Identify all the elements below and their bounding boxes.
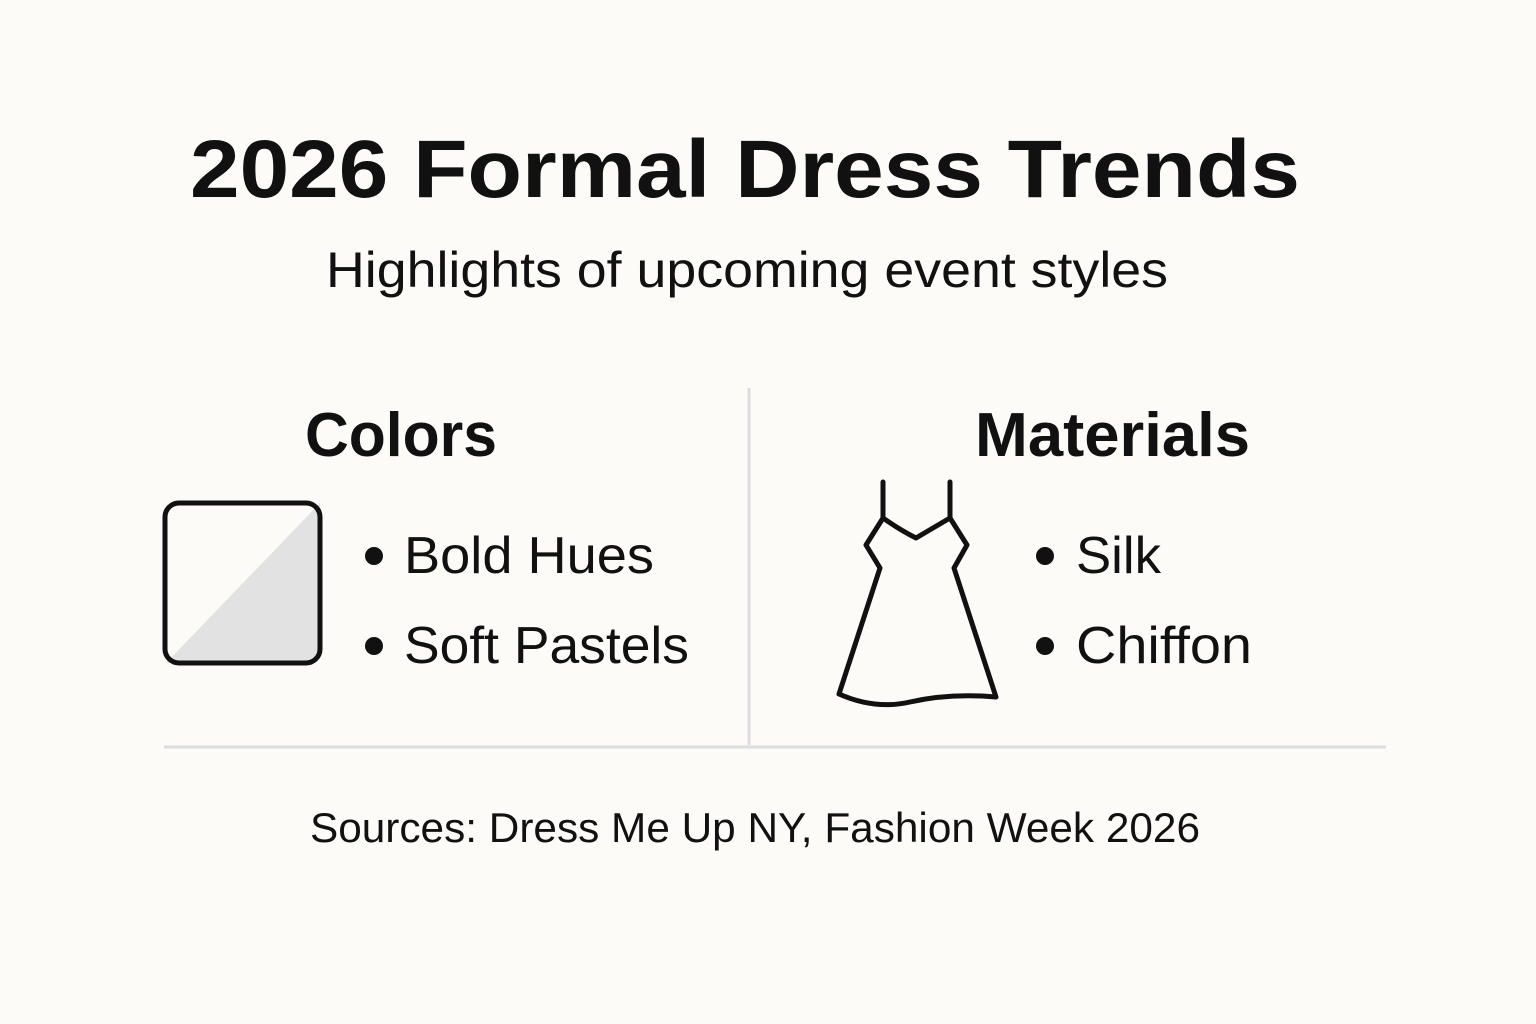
title: 2026 Formal Dress Trends [190,124,1300,215]
panel: colors [165,401,689,675]
list: colors [365,527,689,675]
list: colors: Bold Hues [404,527,654,585]
icon: color swatch [165,503,320,663]
subtitle: Highlights of upcoming event styles [326,242,1168,298]
icon: dress [839,482,996,705]
list: materials: Chiffon [1076,617,1252,675]
heading: colors: Colors [305,401,497,470]
list: materials: Silk [1076,527,1162,585]
list: colors: Soft Pastels [404,617,689,675]
sources: Sources: Dress Me Up NY, Fashion Week 2026 [310,804,1200,851]
heading: materials: Materials [975,401,1250,470]
list: materials [1036,527,1252,675]
panel: materials [839,401,1252,705]
